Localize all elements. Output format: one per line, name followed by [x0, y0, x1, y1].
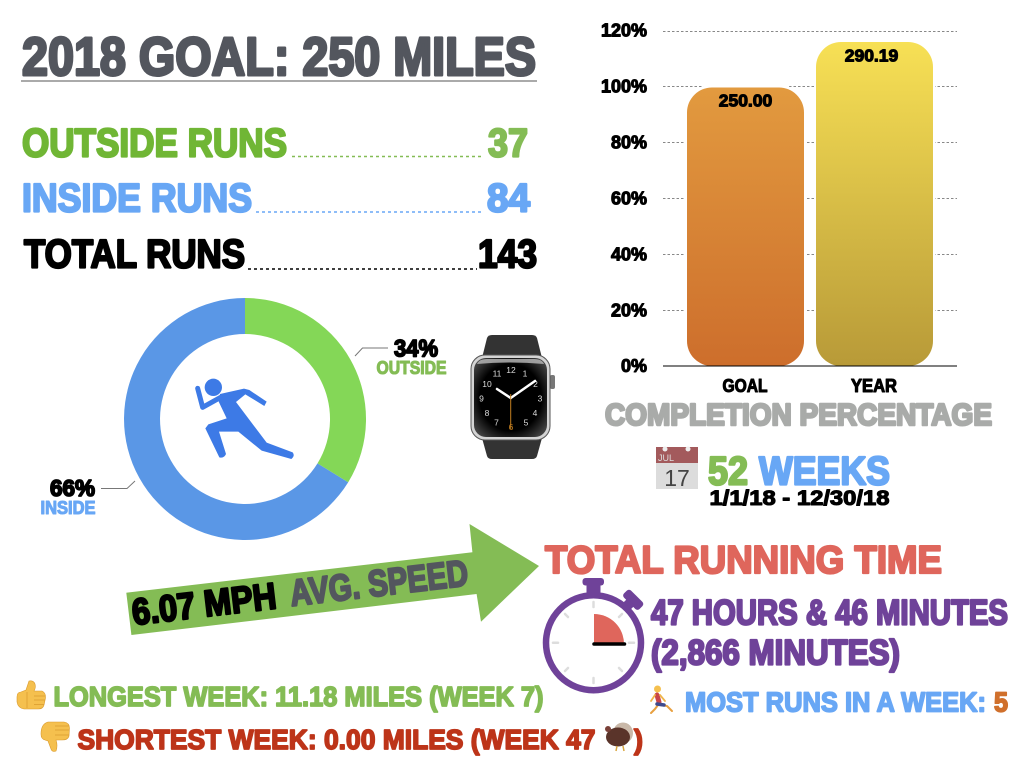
callout: outside share: OUTSIDE — [376, 358, 446, 378]
weeks count: 52 — [708, 450, 748, 494]
icon: apple watch: 10 — [482, 379, 492, 389]
icon: apple watch: 3 — [538, 394, 543, 404]
callout: inside share — [40, 475, 135, 518]
axis labels: 20% — [611, 300, 647, 320]
axis labels: 0% — [621, 356, 647, 376]
weeks count: WEEKS — [759, 450, 890, 494]
heading: total running time: TOTAL RUNNING TIME — [545, 539, 942, 582]
stat: outside runs: 37 — [488, 122, 528, 166]
icon: calendar: JUL — [658, 453, 674, 463]
shortest week: ) — [634, 724, 643, 755]
chart title: COMPLETION PERCENTAGE — [605, 397, 992, 432]
axis labels: 120% — [601, 20, 647, 40]
axis labels: 80% — [611, 132, 647, 152]
arrow: average speed — [126, 524, 539, 635]
stat: total runs: 143 — [478, 232, 537, 276]
icon: thumbs up — [17, 681, 46, 709]
bar: year — [814, 40, 935, 368]
icon: apple watch: 1 — [523, 368, 528, 378]
total time in minutes: (2,866 MINUTES) — [651, 634, 900, 672]
most runs in a week: 5 — [994, 686, 1008, 718]
speed label: AVG. SPEED — [288, 552, 470, 614]
stat: inside runs — [22, 176, 531, 220]
category labels: YEAR — [851, 376, 897, 396]
icon: calendar: 17 — [664, 465, 690, 491]
stat: outside runs: OUTSIDE RUNS — [22, 122, 287, 166]
category labels: GOAL — [722, 376, 768, 396]
callout: inside share: 66% — [50, 475, 95, 501]
most runs in a week: MOST RUNS IN A WEEK: — [685, 686, 986, 718]
bar: goal — [685, 85, 806, 368]
axis labels: 60% — [611, 188, 647, 208]
icon: running figure — [198, 379, 294, 459]
shortest week: SHORTEST WEEK: 0.00 MILES (WEEK 47 — [78, 724, 596, 755]
title: 2018 GOAL: 250 MILES — [22, 27, 536, 87]
icon: apple watch: 11 — [493, 368, 502, 378]
weeks count — [708, 450, 890, 494]
icon: apple watch: 7 — [494, 418, 499, 428]
callout: outside share: 34% — [394, 336, 438, 362]
callout: inside share: INSIDE — [40, 498, 96, 518]
icon: apple watch: 5 — [524, 418, 529, 428]
donut segment: inside — [124, 298, 348, 540]
stat: total runs: TOTAL RUNS — [24, 232, 245, 276]
donut chart: outside vs inside runs — [124, 298, 366, 540]
icon: calendar — [656, 446, 698, 491]
icon: apple watch: 8 — [485, 408, 490, 418]
speed value: 6.07 MPH — [130, 575, 278, 633]
date range: 1/1/18 - 12/30/18 — [710, 487, 890, 510]
longest week: LONGEST WEEK: 11.18 MILES (WEEK 7) — [54, 681, 544, 712]
icon: apple watch — [471, 335, 555, 459]
icon: apple watch: 2 — [533, 379, 538, 389]
stat: outside runs — [22, 122, 528, 166]
axis labels: 40% — [611, 244, 647, 264]
category labels — [722, 376, 897, 396]
bar: goal: 250.00 — [719, 90, 773, 110]
axis labels: 100% — [601, 76, 647, 96]
icon: apple watch: 4 — [533, 408, 538, 418]
icon: turkey — [605, 722, 633, 751]
bar chart: completion percentage — [601, 20, 957, 396]
stat: total runs — [24, 232, 537, 276]
stat: inside runs: 84 — [487, 176, 531, 220]
stat: inside runs: INSIDE RUNS — [22, 176, 252, 220]
icon: apple watch: 12 — [506, 365, 516, 375]
callout: outside share — [355, 336, 446, 378]
icon: apple watch: 6 — [509, 422, 514, 432]
icon: apple watch: 9 — [479, 394, 484, 404]
icon: runner emoji — [651, 686, 672, 713]
axis labels — [601, 20, 647, 376]
icon: stopwatch — [546, 578, 645, 690]
bar: year: 290.19 — [845, 46, 899, 66]
icon: thumbs down — [41, 722, 70, 751]
donut segment: outside — [245, 298, 366, 482]
